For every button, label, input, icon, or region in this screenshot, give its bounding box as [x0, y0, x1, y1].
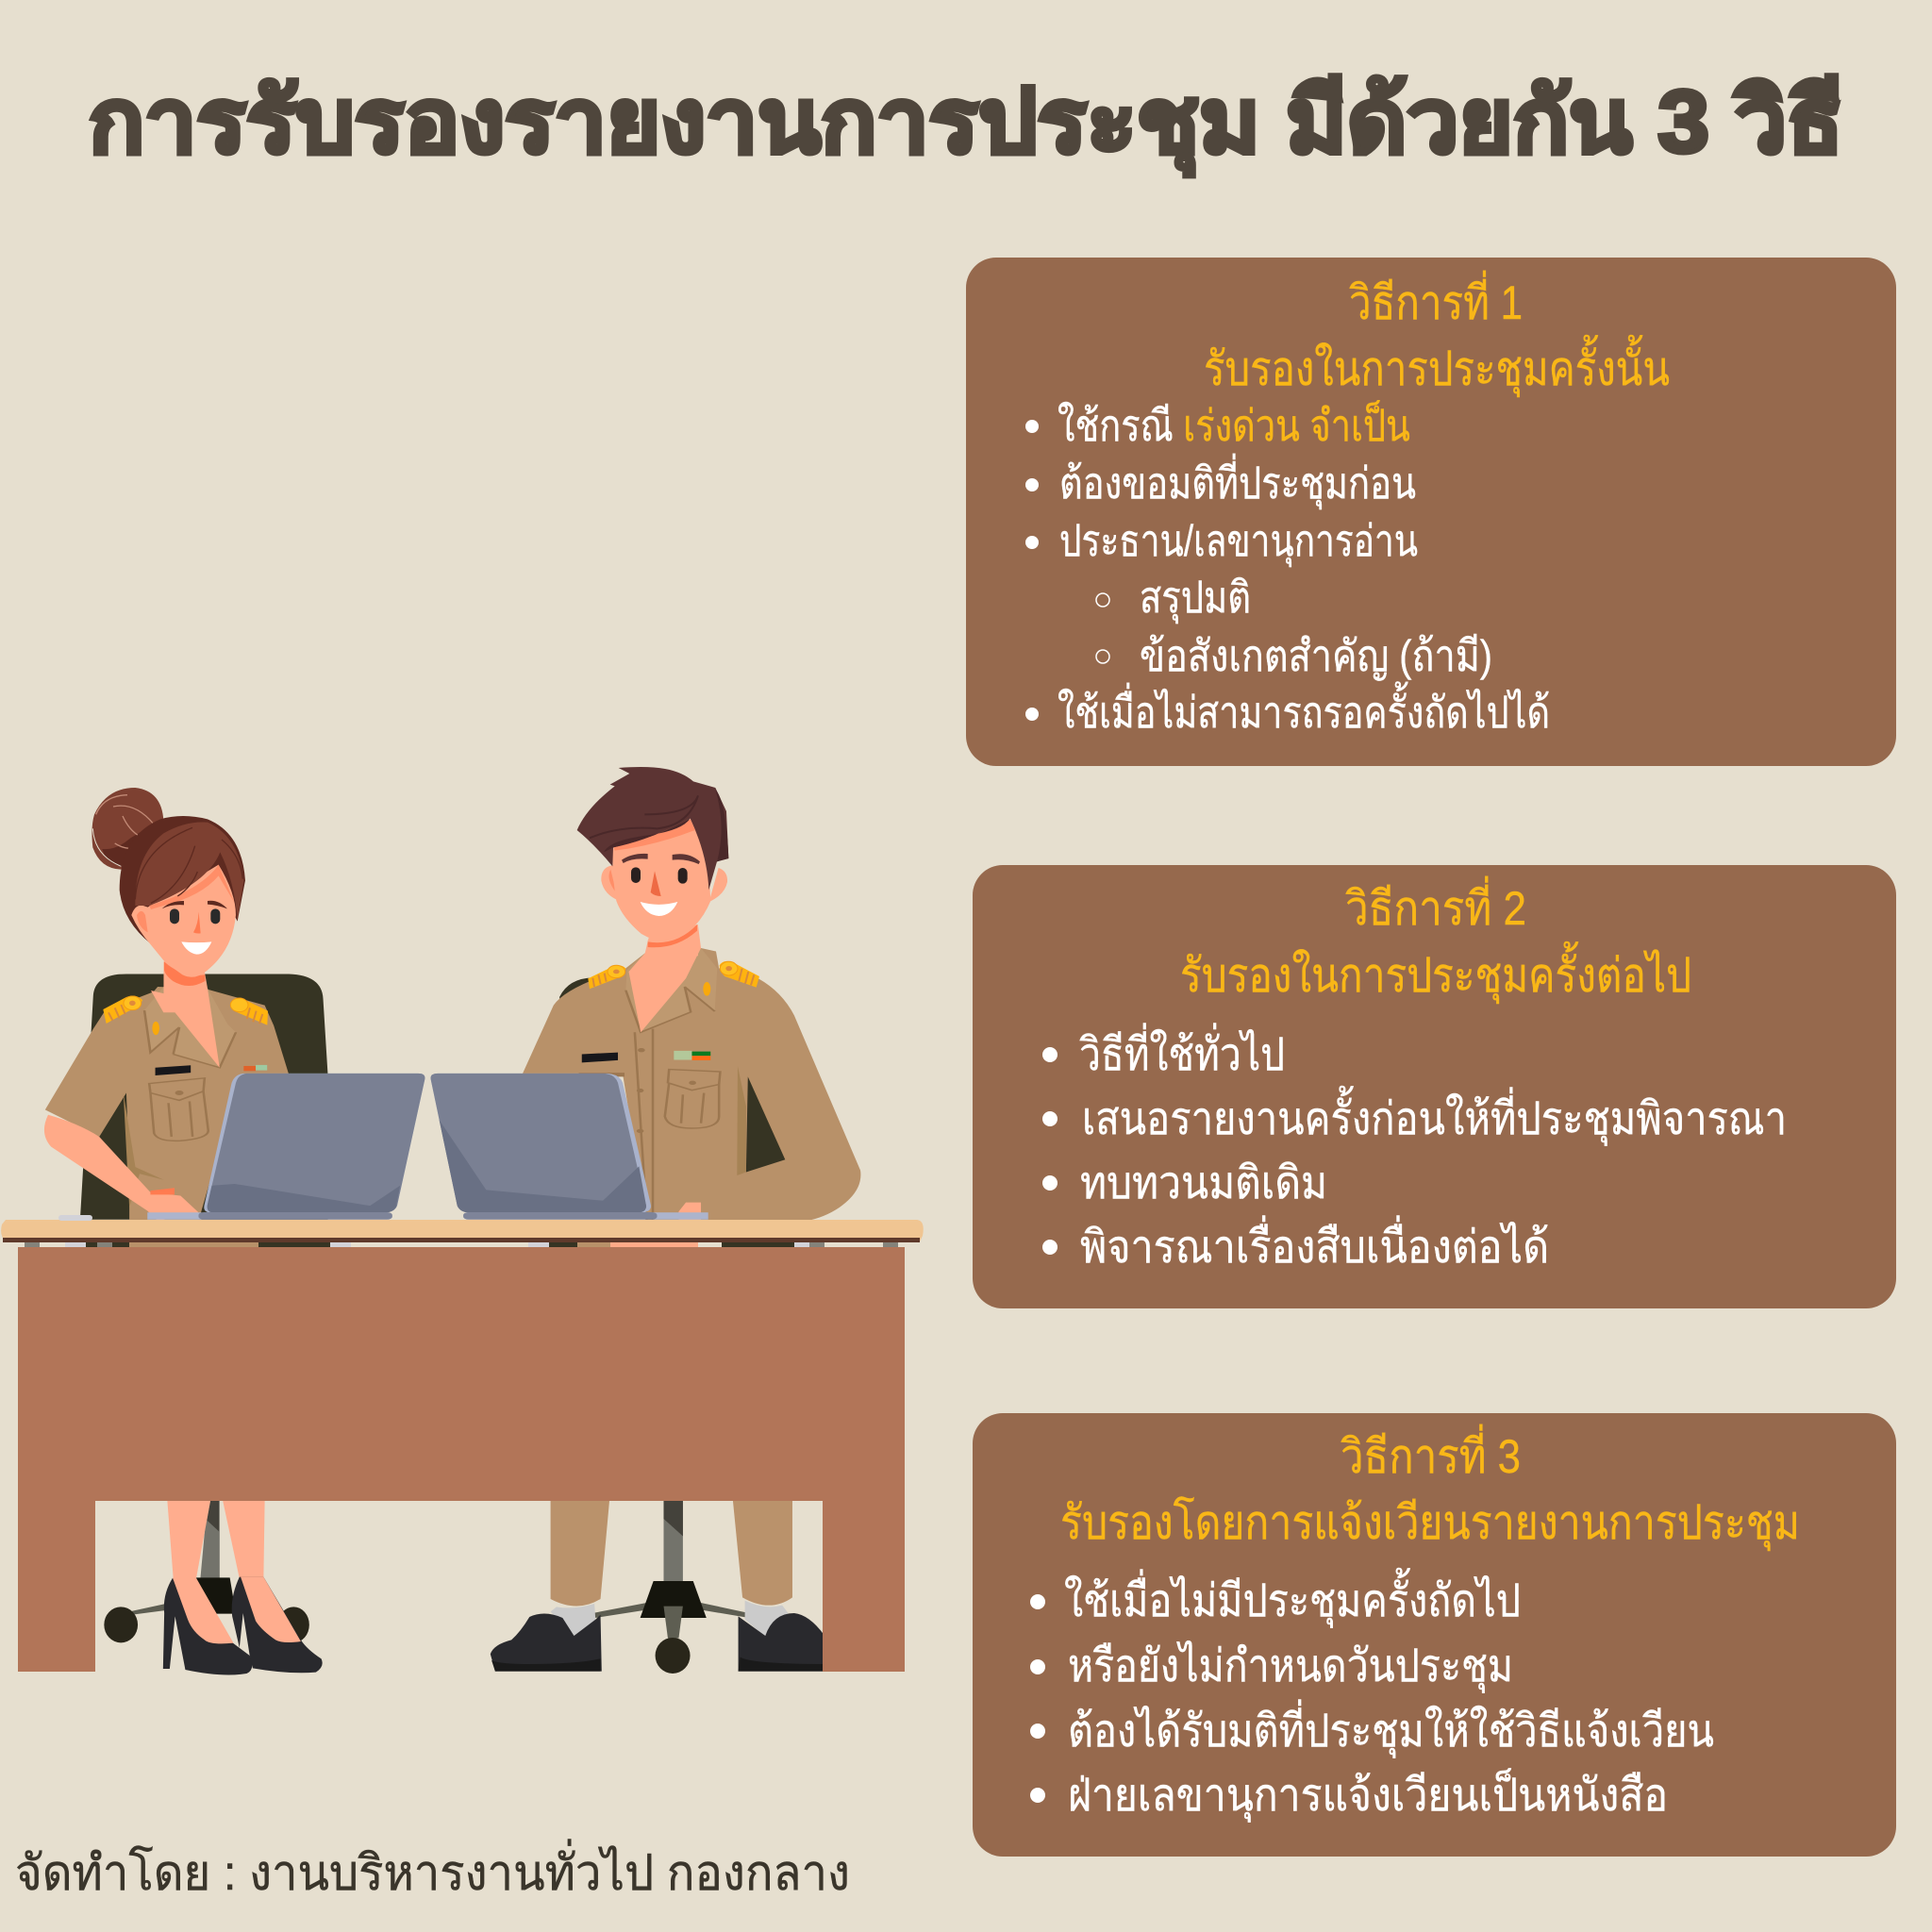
method 3 bullets: ต้องได้รับมติที่ประชุมให้ใช้วิธีแจ้งเวียน — [1068, 1699, 1714, 1758]
footer credit: จัดทำโดย : งานบริหารงานทั่วไป กองกลาง — [15, 1839, 850, 1901]
method 2 bullets — [1042, 1023, 1787, 1273]
man shirt — [523, 948, 860, 1221]
method 3 bullets: หรือยังไม่กำหนดวันประชุม — [1068, 1640, 1513, 1693]
method 2 bullets: เสนอรายงานครั้งก่อนให้ที่ประชุมพิจารณา — [1082, 1086, 1787, 1146]
method 1 bullets: สรุปมติ — [1140, 573, 1251, 625]
method 1 bullets: ใช้กรณี เร่งด่วน จำเป็น — [1058, 400, 1410, 450]
man head — [577, 767, 759, 996]
desk — [1, 1215, 924, 1672]
man chair gap — [746, 1076, 785, 1172]
method 1 bullets: ข้อสังเกตสำคัญ (ถ้ามี) — [1140, 631, 1492, 680]
figures, drawn in body coordinates — [44, 924, 860, 1221]
method 1 heading: รับรองในการประชุมครั้งนั้น — [1204, 335, 1670, 397]
desk top — [1, 1220, 924, 1241]
desk under-strip details — [25, 1241, 898, 1248]
method 1 bullets: ใช้เมื่อไม่สามารถรอครั้งถัดไปได้ — [1058, 681, 1550, 737]
woman hair back — [120, 816, 245, 944]
woman pocket — [149, 1078, 208, 1141]
right laptop — [431, 1074, 651, 1212]
method 2 heading — [1180, 876, 1691, 1004]
man eyes — [631, 867, 641, 883]
man pins — [703, 982, 710, 996]
woman hair bun — [92, 788, 163, 870]
woman legs and heels — [167, 1500, 210, 1578]
method 3 bullets — [1030, 1568, 1714, 1823]
woman epaulets — [103, 995, 142, 1024]
method 3 bullets: ฝ่ายเลขานุการแจ้งเวียนเป็นหนังสือ — [1068, 1768, 1668, 1823]
method 3 heading: วิธีการที่ 3 — [1341, 1424, 1521, 1483]
method 3 heading — [1060, 1424, 1800, 1551]
woman name tag and ribbon — [156, 1065, 191, 1075]
man hand — [678, 1203, 701, 1221]
method 2 heading: วิธีการที่ 2 — [1345, 876, 1526, 935]
method 1 bullets: ประธาน/เลขานุการอ่าน — [1059, 516, 1418, 568]
woman nose — [193, 912, 201, 934]
woman hair front — [135, 822, 243, 920]
woman head — [92, 788, 268, 1025]
man hair — [577, 767, 728, 890]
man ears — [601, 865, 620, 901]
woman pin — [152, 1022, 159, 1035]
woman body: shirt — [45, 987, 289, 1221]
woman eyes — [170, 908, 179, 924]
method 2 bullets: พิจารณาเรื่องสืบเนื่องต่อได้ — [1080, 1215, 1549, 1273]
method 3 heading: รับรองโดยการแจ้งเวียนรายงานการประชุม — [1060, 1496, 1800, 1551]
woman brows — [162, 901, 227, 908]
man trousers, socks, shoes — [551, 1500, 609, 1606]
man collar — [625, 948, 717, 1032]
woman neck — [151, 961, 210, 1012]
woman smile — [181, 941, 211, 955]
man name tag and ribbon — [582, 1053, 618, 1062]
man neck — [648, 924, 698, 956]
title: การรับรองรายงานการประชุม มีด้วยกัน 3 วิธี — [89, 72, 1843, 176]
method 2 bullets: วิธีที่ใช้ทั่วไป — [1079, 1023, 1285, 1080]
method 1 bullets — [1025, 400, 1550, 737]
man face — [612, 819, 710, 941]
man smile — [641, 902, 677, 916]
man chair — [559, 977, 602, 1006]
panel: method 2 — [973, 865, 1896, 1308]
man epaulets — [588, 965, 625, 989]
method 2 heading: รับรองในการประชุมครั้งต่อไป — [1180, 941, 1691, 1004]
chair bases and legs under the desk — [104, 1500, 824, 1674]
man chest — [629, 924, 701, 1032]
panel: method 1 — [966, 258, 1896, 766]
method 1 bullets: ต้องขอมติที่ประชุมก่อน — [1059, 453, 1416, 510]
method 1 heading — [1204, 271, 1670, 397]
woman arm — [44, 1115, 198, 1221]
panel: method 3 — [973, 1413, 1896, 1857]
illustration: two officials at a desk — [1, 767, 924, 1674]
left laptop — [204, 1074, 425, 1212]
woman chest — [163, 961, 220, 1068]
woman chair — [80, 974, 328, 1221]
method 1 heading: วิธีการที่ 1 — [1349, 271, 1523, 329]
method 2 bullets: ทบทวนมติเดิม — [1080, 1158, 1327, 1208]
man nose — [651, 871, 661, 896]
man pocket — [665, 1070, 720, 1128]
desk front — [18, 1247, 905, 1672]
method 3 bullets: ใช้เมื่อไม่มีประชุมครั้งถัดไป — [1064, 1568, 1521, 1628]
woman face — [131, 865, 236, 977]
man brows — [622, 854, 700, 864]
